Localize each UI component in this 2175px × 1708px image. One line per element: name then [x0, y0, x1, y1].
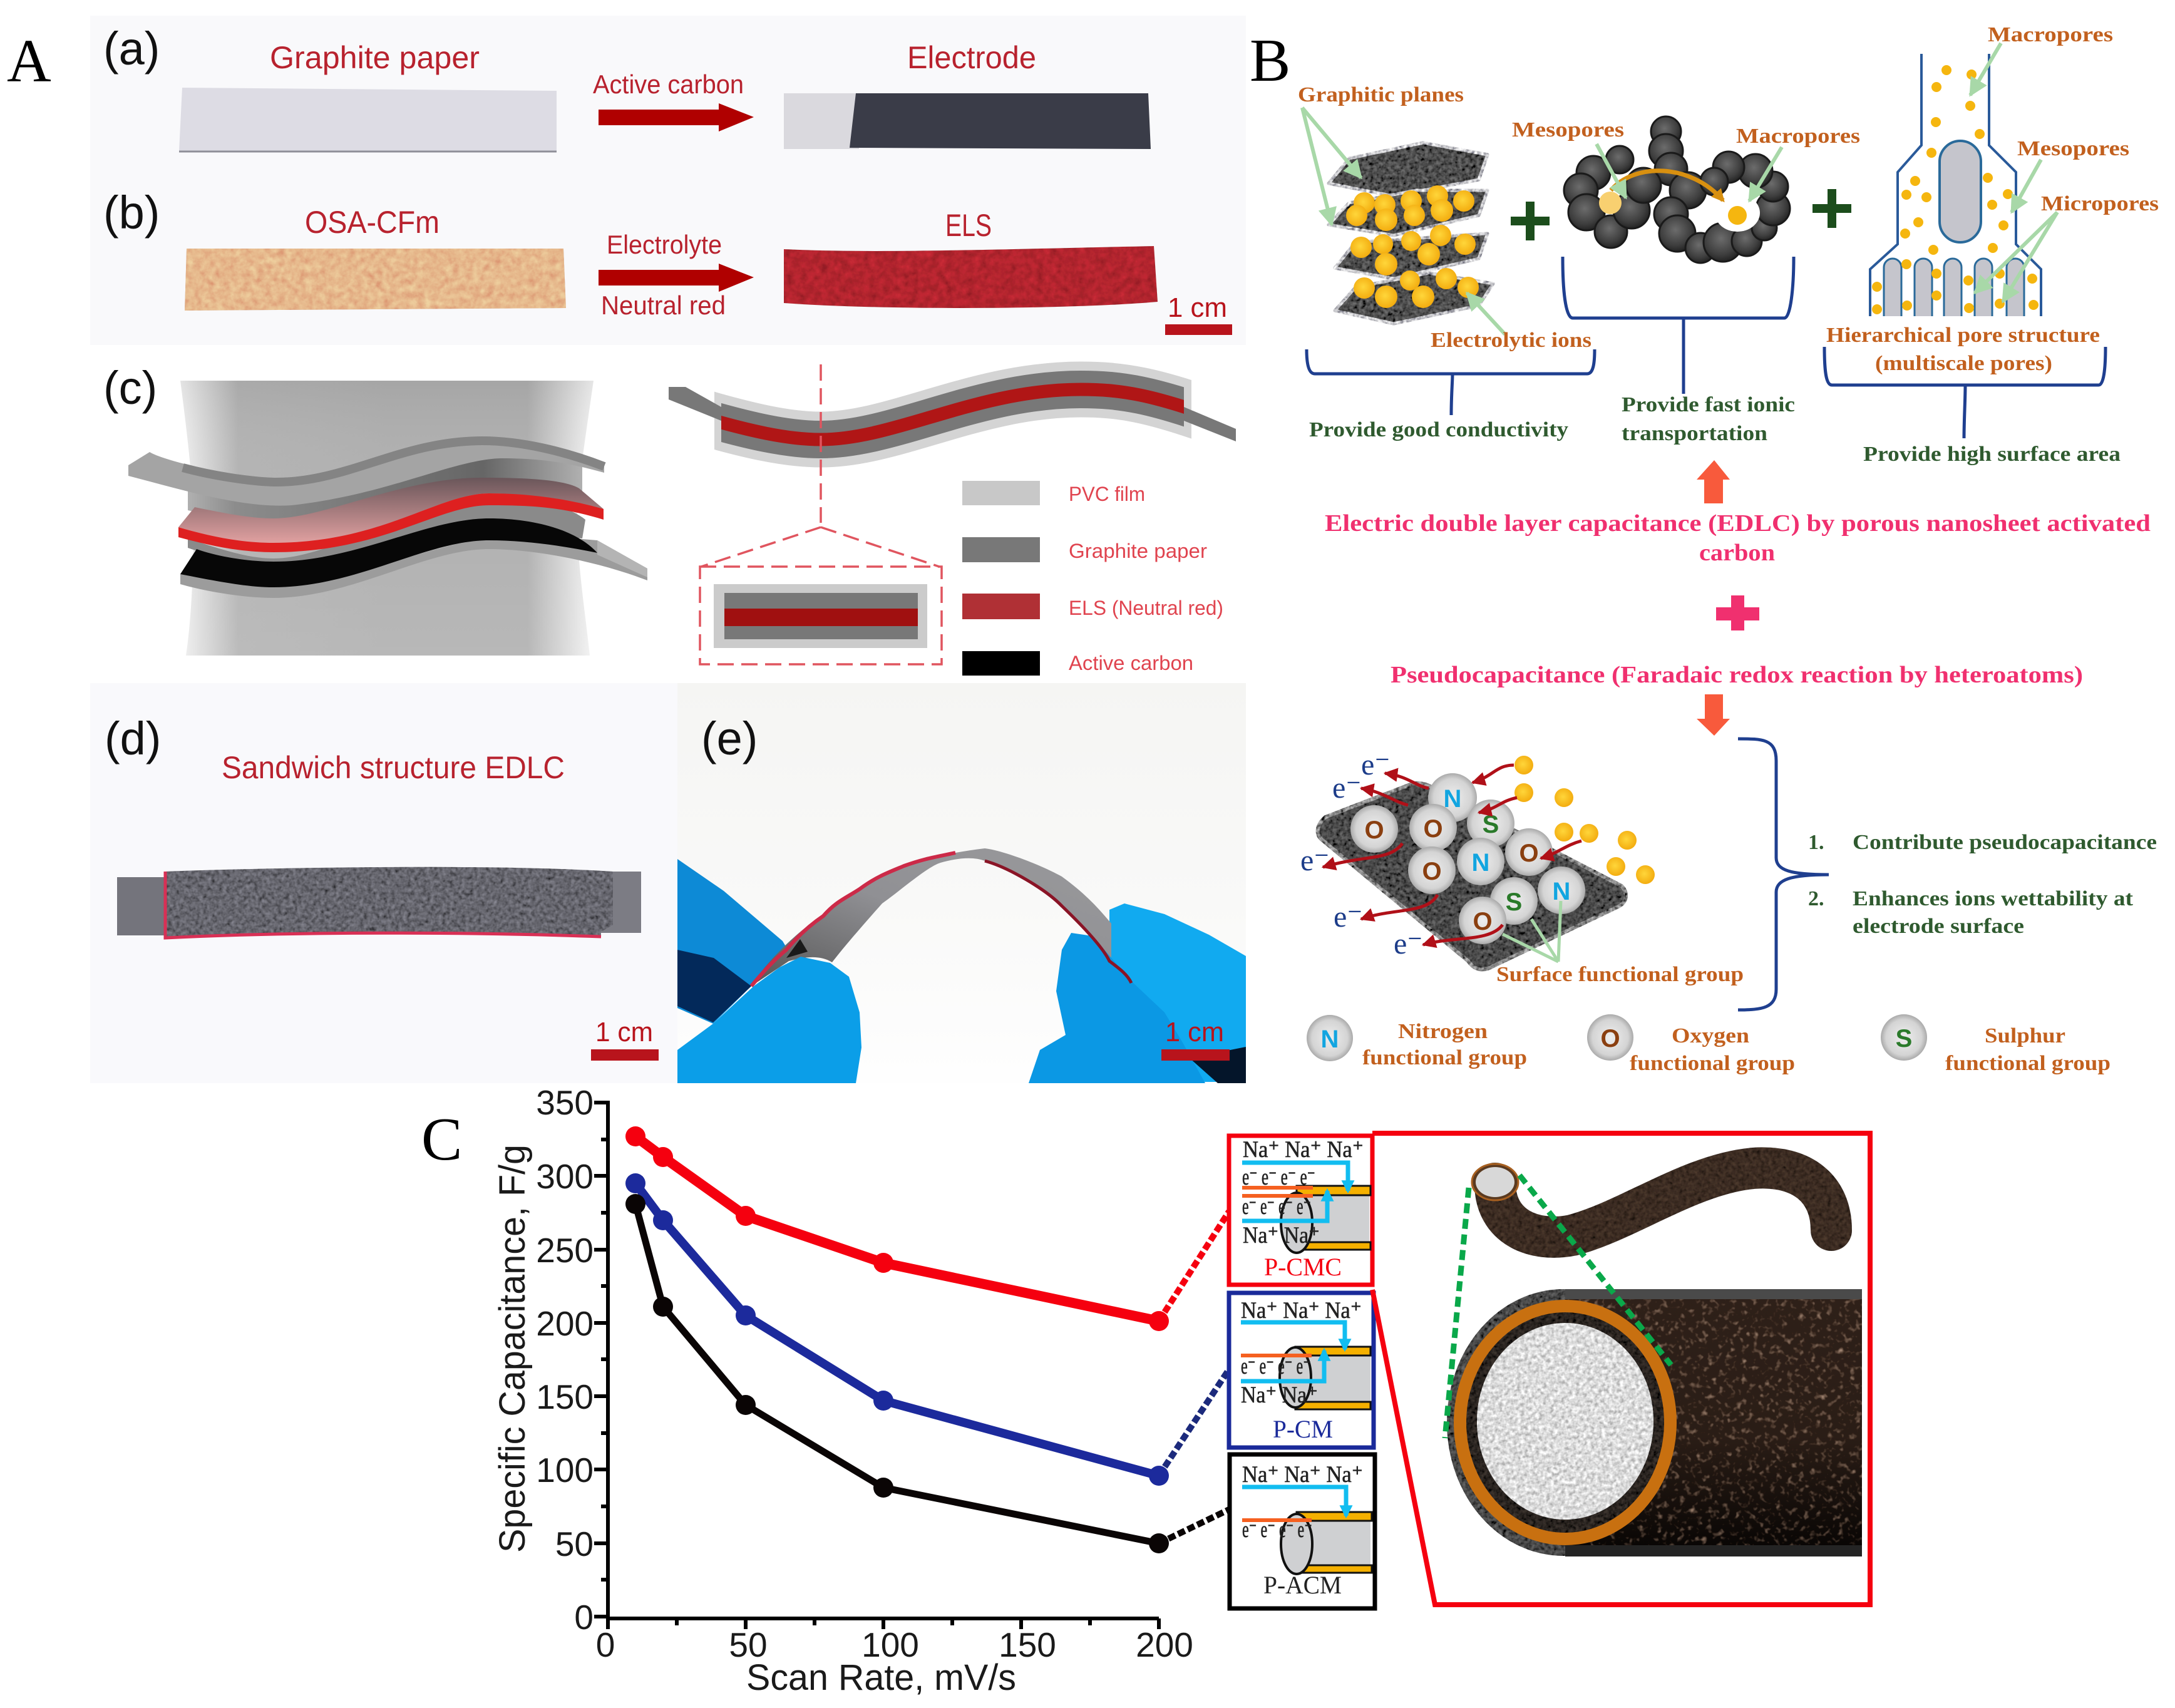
- heading: EDLC: Electric double layer capacitance (EDLC) by porous nanosheet activated: [1325, 510, 2151, 537]
- label (c): (c): [103, 362, 157, 414]
- ions in pores: [1599, 192, 1622, 214]
- panel: (c) layered device schematic: [103, 362, 1236, 676]
- shadow band: [188, 451, 582, 529]
- x tick labels: 150: [999, 1625, 1056, 1664]
- legend: Graphite paper: [1069, 540, 1207, 562]
- legend: sulphur: functional group: [1945, 1052, 2111, 1075]
- P-CM current paths: [1241, 1322, 1345, 1381]
- y tick labels: 250: [536, 1231, 594, 1270]
- scale bar: 1 cm: [595, 1017, 653, 1047]
- large brace: [1738, 739, 1829, 1010]
- label: macropores top: Macropores: [1988, 23, 2113, 46]
- arrow: electrolyte and neutral red: Electrolyte: [607, 230, 722, 259]
- arrow: active carbon: Active carbon: [593, 69, 744, 99]
- micropore channels: [1884, 259, 2024, 316]
- benefit: good conductivity: Provide good conductivity: [1309, 418, 1568, 441]
- legend: Active carbon: [1069, 652, 1193, 674]
- bent film: [751, 848, 1111, 986]
- y axis title: Specific Capacitance, F/g: [492, 1145, 533, 1553]
- cross-section wave: [669, 387, 1236, 441]
- y tick labels: [536, 1083, 594, 1637]
- functional group spheres: N: [1472, 849, 1489, 877]
- list of pseudocapacitance effects: electrode surface: [1853, 915, 2024, 938]
- label: OSA-CFm: OSA-CFm: [305, 205, 440, 240]
- legend: oxygen: O: [1600, 1025, 1620, 1052]
- up arrow: [1697, 460, 1730, 503]
- scale bar: [1161, 1017, 1230, 1061]
- central macropore: [1940, 141, 1981, 242]
- label: sandwich structure: Sandwich structure EDLC: [222, 750, 565, 785]
- legend: PVC film: [1069, 483, 1145, 505]
- functional group spheres: O: [1423, 815, 1443, 843]
- plus sign: [1511, 202, 1550, 240]
- y tick labels: 350: [536, 1083, 594, 1122]
- inset: P-CM schematic: Na⁺ Na⁺: [1241, 1382, 1318, 1408]
- pink plus: [1716, 595, 1759, 630]
- label: electrode: Electrode: [907, 40, 1036, 75]
- illustration: enlarged fiber cross-section: [1447, 1289, 1862, 1556]
- label: macropores: Macropores: [1736, 125, 1860, 148]
- x tick labels: 100: [861, 1625, 919, 1664]
- label (e): (e): [701, 713, 758, 764]
- benefit: fast ionic transportation: Provide fast ionic: [1622, 393, 1795, 416]
- panel letter A: A: [7, 28, 51, 95]
- enlarged cross-section: [714, 584, 927, 648]
- graphitic planes stack: [1329, 143, 1493, 324]
- list of pseudocapacitance effects: 2.: [1808, 887, 1824, 910]
- functional group spheres: O: [1473, 908, 1493, 935]
- panel letter B: B: [1250, 27, 1290, 95]
- scale bar: [591, 1017, 659, 1061]
- y tick labels: 0: [574, 1598, 594, 1637]
- P-CM ion text: Na⁺ Na⁺ Na⁺: [1241, 1298, 1362, 1324]
- electron labels: e⁻: [1332, 771, 1362, 805]
- P-CMC ion text: Na⁺ Na⁺ Na⁺: [1243, 1137, 1364, 1163]
- free ions: [1514, 756, 1655, 884]
- list of pseudocapacitance effects: 1.: [1808, 831, 1824, 854]
- functional group spheres: O: [1519, 840, 1539, 867]
- legend: oxygen: [1587, 1014, 1795, 1075]
- label: graphite paper: Graphite paper: [270, 40, 480, 75]
- P-CM label: P-CM: [1273, 1415, 1333, 1443]
- P-CMC current paths: [1242, 1163, 1348, 1221]
- inset: P-ACM schematic: [1230, 1454, 1375, 1608]
- inset: P-CMC schematic: e⁻ e⁻ e⁻ e⁻: [1242, 1194, 1311, 1220]
- right glove back finger: [1109, 903, 1246, 1082]
- electron labels: e⁻: [1334, 900, 1363, 934]
- pointer arrows to pores: [1597, 144, 1782, 201]
- y tick labels: 100: [536, 1451, 594, 1489]
- left glove finger: [677, 957, 861, 1083]
- label: mesopores right: Mesopores: [2017, 137, 2129, 160]
- label: electrolytic ions: Electrolytic ions: [1431, 329, 1591, 352]
- scale bar: 1 cm: [1165, 1017, 1224, 1047]
- functional group spheres: O: [1422, 858, 1442, 885]
- graphite paper strip: [179, 88, 557, 152]
- legend: sulphur: Sulphur: [1985, 1024, 2065, 1047]
- P-CMC label: P-CMC: [1264, 1253, 1342, 1281]
- red electrolyte layer: [178, 478, 604, 552]
- green pointers: [1503, 901, 1561, 962]
- hierarchical pore diagram: [1870, 54, 2041, 316]
- panel: (e) bent device photo: [677, 683, 1246, 1083]
- green dashed zoom lines: [1445, 1175, 1671, 1438]
- functional group spheres: [1350, 773, 1585, 944]
- electrode strip: [784, 93, 1151, 149]
- series: P-CM: [625, 1173, 1229, 1486]
- functional group spheres: S: [1506, 888, 1522, 916]
- y tick labels: 150: [536, 1377, 594, 1416]
- legend: oxygen: functional group: [1630, 1052, 1795, 1075]
- left glove back hand: [677, 859, 789, 1024]
- ions in pores: [1872, 65, 2039, 314]
- x tick labels: 50: [729, 1625, 768, 1664]
- OSA-CFm strip: [185, 249, 566, 311]
- sandwich strip: [117, 867, 641, 938]
- arrow: electrolyte and neutral red: Neutral red: [601, 291, 726, 320]
- list of pseudocapacitance effects: Contribute pseudocapacitance: [1853, 831, 2157, 854]
- panel: EDLC and pseudocapacitance mechanism: [1298, 23, 2159, 1075]
- legend: sulphur: S: [1896, 1025, 1912, 1052]
- benefit: high surface area: Provide high surface area: [1863, 443, 2121, 466]
- scale bar: [1165, 292, 1232, 335]
- label: hierarchical pore structure: Hierarchical pore structure: [1826, 324, 2100, 347]
- x tick labels: [596, 1625, 1193, 1664]
- gray layer under red: [188, 500, 585, 567]
- functional group spheres: O: [1364, 816, 1384, 844]
- functional group spheres: S: [1483, 811, 1499, 838]
- legend: nitrogen: functional group: [1362, 1046, 1527, 1069]
- P-ACM label: P-ACM: [1263, 1571, 1342, 1599]
- label (d): (d): [105, 713, 161, 764]
- electrolyte ions between sheets: [1346, 185, 1479, 308]
- top graphite layer: [128, 436, 604, 506]
- callout: red zoom frame: [1372, 1133, 1870, 1605]
- right glove front finger: [1029, 933, 1205, 1083]
- functional group spheres: N: [1553, 878, 1570, 905]
- P-ACM ion text: Na⁺ Na⁺ Na⁺: [1242, 1462, 1363, 1488]
- dashed zoom guide: [700, 364, 942, 664]
- label: ELS: ELS: [945, 208, 992, 243]
- ELS strip: [784, 246, 1158, 308]
- inset: P-CM schematic: e⁻ e⁻ e⁻ e⁻: [1241, 1354, 1311, 1379]
- legend: nitrogen: N: [1321, 1026, 1339, 1053]
- panel: (d) sandwich structure photo: [90, 683, 677, 1083]
- electron labels: [1300, 748, 1423, 960]
- down arrow: [1697, 694, 1730, 736]
- porous core: [1477, 1323, 1653, 1520]
- legend: sulphur: [1881, 1014, 2111, 1075]
- inset: P-ACM schematic: e⁻ e⁻ e⁻ e⁻: [1242, 1517, 1312, 1543]
- axes and ticks: [594, 1101, 1159, 1629]
- P-ACM current paths: [1242, 1487, 1346, 1520]
- label: multiscale pores: (multiscale pores): [1875, 352, 2052, 375]
- pointer arrows to pore diagram: [1970, 43, 2057, 302]
- label: graphitic planes: Graphitic planes: [1298, 83, 1464, 106]
- green pointer arrows: [1302, 108, 1505, 334]
- heading: EDLC: [1325, 510, 2151, 566]
- functional group spheres: N: [1444, 785, 1461, 813]
- y tick labels: 50: [555, 1525, 594, 1563]
- label: micropores: Micropores: [2041, 192, 2159, 215]
- illustration: curved fiber: [1472, 1164, 1831, 1237]
- pore outline: [1870, 54, 2041, 316]
- arrow: electrolyte and neutral red: [599, 230, 754, 320]
- film red edge: [985, 861, 1131, 983]
- electron labels: e⁻: [1300, 844, 1330, 877]
- pale pore openings: [1715, 194, 1760, 232]
- legend: nitrogen: Nitrogen: [1398, 1020, 1488, 1043]
- legend: nitrogen: [1307, 1015, 1527, 1069]
- label: surface functional group: Surface functional group: [1496, 963, 1744, 986]
- series: P-ACM: [625, 1194, 1229, 1553]
- glove shadow: [1190, 1047, 1246, 1083]
- panel: (a) and (b) photo strips: [90, 16, 1246, 345]
- heading: pseudocapacitance: Pseudocapacitance (Faradaic redox reaction by heteroatoms): [1391, 662, 2083, 688]
- electron labels: e⁻: [1394, 927, 1423, 960]
- brackets: [1307, 257, 2106, 438]
- graphene sheets: [1329, 143, 1493, 324]
- surface functional groups plate: [1300, 748, 1655, 969]
- inset: P-CM schematic: [1229, 1293, 1374, 1448]
- legend: oxygen: Oxygen: [1672, 1024, 1749, 1047]
- carbon plate: [1318, 783, 1626, 969]
- arrow: active carbon: [593, 69, 754, 131]
- P-CM cylinder: [1280, 1347, 1370, 1409]
- red wavy electron and ion arrows: [1323, 765, 1581, 945]
- P-CMC cylinder: [1281, 1186, 1370, 1253]
- scale bar: 1 cm: [1168, 292, 1227, 323]
- list of pseudocapacitance effects: Enhances ions wettability at: [1853, 887, 2134, 910]
- inset: P-CMC schematic: Na⁺ Na⁺: [1243, 1223, 1320, 1248]
- line chart: specific capacitance vs scan rate: [492, 1083, 1229, 1698]
- legend: ELS (Neutral red): [1069, 597, 1223, 619]
- inset: P-CMC schematic: e⁻ e⁻ e⁻ e⁻: [1242, 1165, 1315, 1190]
- inner dark layer: [1460, 1306, 1670, 1539]
- series: P-CMC: [625, 1126, 1229, 1331]
- transport arc: [1611, 171, 1723, 200]
- benefit: fast ionic transportation: [1622, 393, 1795, 445]
- benefit: fast ionic transportation: transportation: [1622, 422, 1767, 445]
- heading: EDLC: carbon: [1699, 540, 1775, 566]
- orange ring: [1460, 1306, 1670, 1539]
- x tick labels: 0: [596, 1625, 615, 1664]
- electron labels: e⁻: [1361, 748, 1391, 781]
- inset: P-CMC schematic: [1229, 1136, 1372, 1285]
- P-ACM cylinder: [1281, 1512, 1372, 1574]
- tube body: [1565, 1289, 1862, 1556]
- gray cylinder: [180, 381, 594, 656]
- label (b): (b): [103, 187, 160, 239]
- list of pseudocapacitance effects: [1808, 831, 2157, 938]
- carbon layer on graphite: [180, 518, 647, 598]
- label: mesopores: Mesopores: [1512, 118, 1624, 141]
- outer shell: [1447, 1289, 1680, 1556]
- y tick labels: 200: [536, 1304, 594, 1343]
- porous carbon particle ring: [1564, 116, 1790, 263]
- x tick labels: 200: [1136, 1625, 1193, 1664]
- legend: [962, 481, 1223, 676]
- x axis title: Scan Rate, mV/s: [746, 1657, 1016, 1698]
- y tick labels: 300: [536, 1157, 594, 1196]
- label (a): (a): [103, 23, 160, 75]
- panel letter C: C: [421, 1106, 462, 1173]
- plus sign: [1812, 189, 1851, 228]
